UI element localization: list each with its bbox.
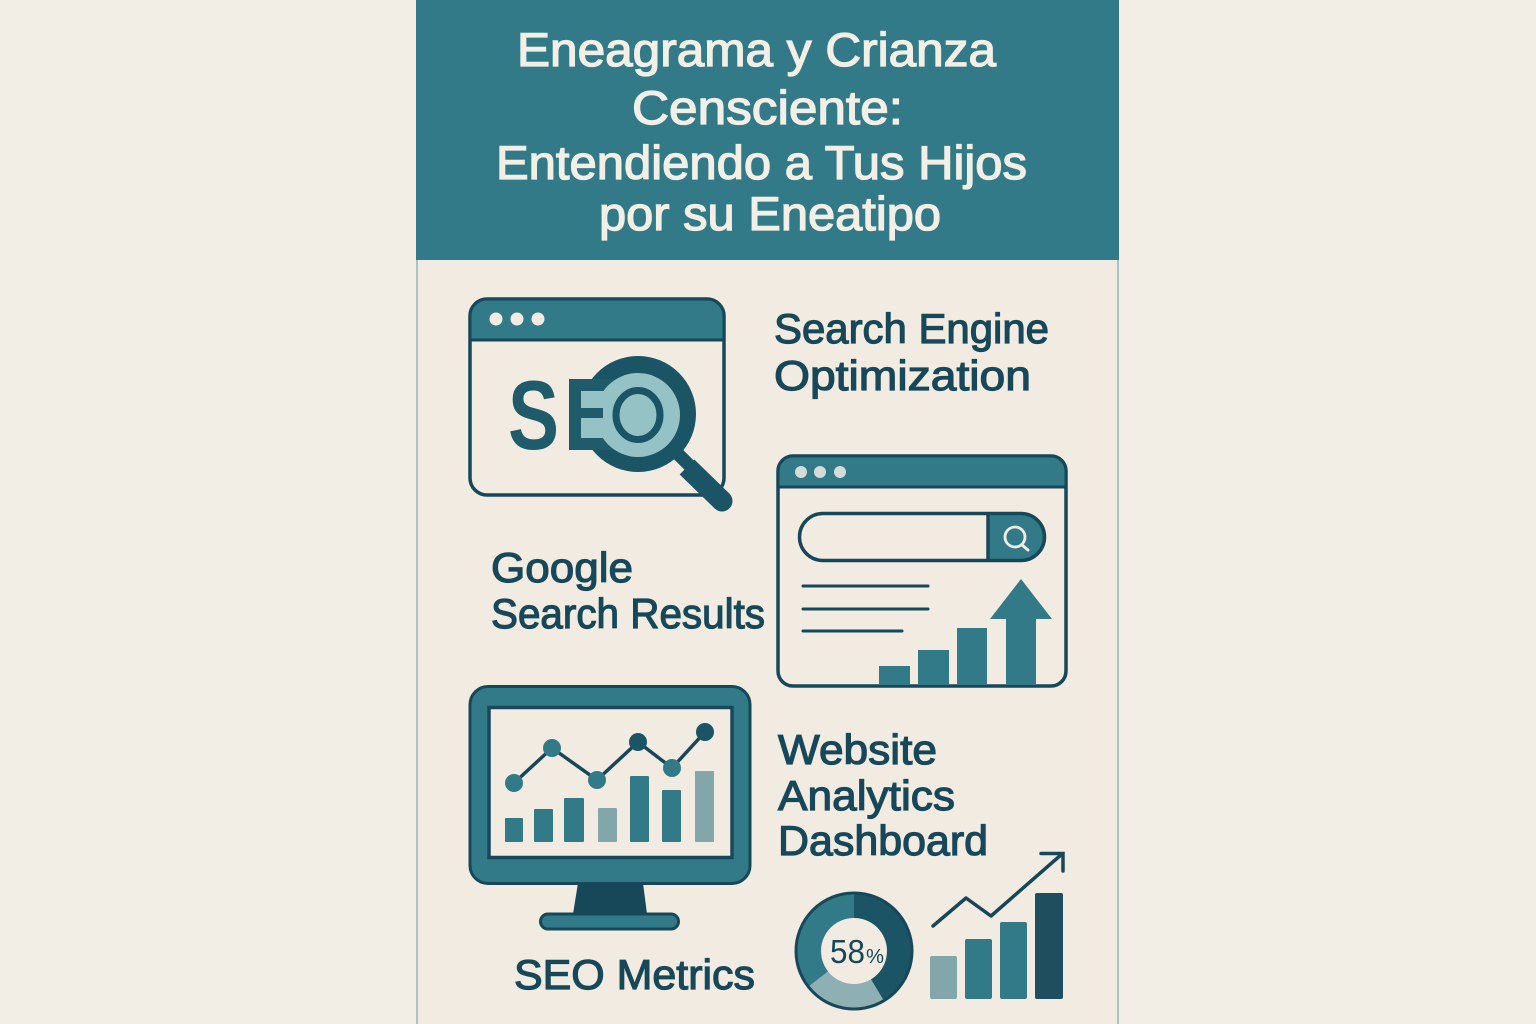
title: por su Eneatipo: [599, 187, 941, 240]
label: Google Search Results: Search Results: [491, 590, 765, 637]
donut chart: 58%: [796, 893, 912, 1009]
screen line chart: [505, 723, 714, 792]
rising bars with arrow: [879, 579, 1052, 685]
icon: search results browser window: [778, 456, 1066, 686]
icon: SEO browser window with magnifier: [470, 299, 732, 512]
title: Censciente:: [632, 81, 903, 134]
screen bar chart: [505, 771, 714, 842]
search bar: [800, 513, 1044, 560]
donut chart: 58%: %: [866, 946, 884, 968]
label: Website Analytics Dashboard: [778, 726, 988, 864]
icon: analytics monitor: [470, 686, 750, 929]
label: Google Search Results: [491, 544, 765, 637]
icon: SEO browser window with magnifier: S: [508, 360, 559, 470]
donut chart: 58%: 58: [830, 933, 865, 970]
label: Google Search Results: Google: [491, 544, 633, 591]
title: [496, 23, 1027, 240]
label: Website Analytics Dashboard: Dashboard: [778, 817, 988, 864]
label: Website Analytics Dashboard: Website: [778, 726, 937, 773]
title: Entendiendo a Tus Hijos: [496, 136, 1027, 189]
header banner: [416, 0, 1119, 260]
label: Search Engine Optimization: [774, 305, 1049, 399]
label: Search Engine Optimization: Search Engine: [774, 305, 1049, 352]
label: Search Engine Optimization: Optimization: [774, 352, 1031, 399]
title: Eneagrama y Crianza: [517, 23, 997, 76]
label: Website Analytics Dashboard: Analytics: [778, 772, 955, 819]
label: SEO Metrics: SEO Metrics: [514, 951, 755, 998]
bar chart with trend arrow: [930, 854, 1063, 999]
